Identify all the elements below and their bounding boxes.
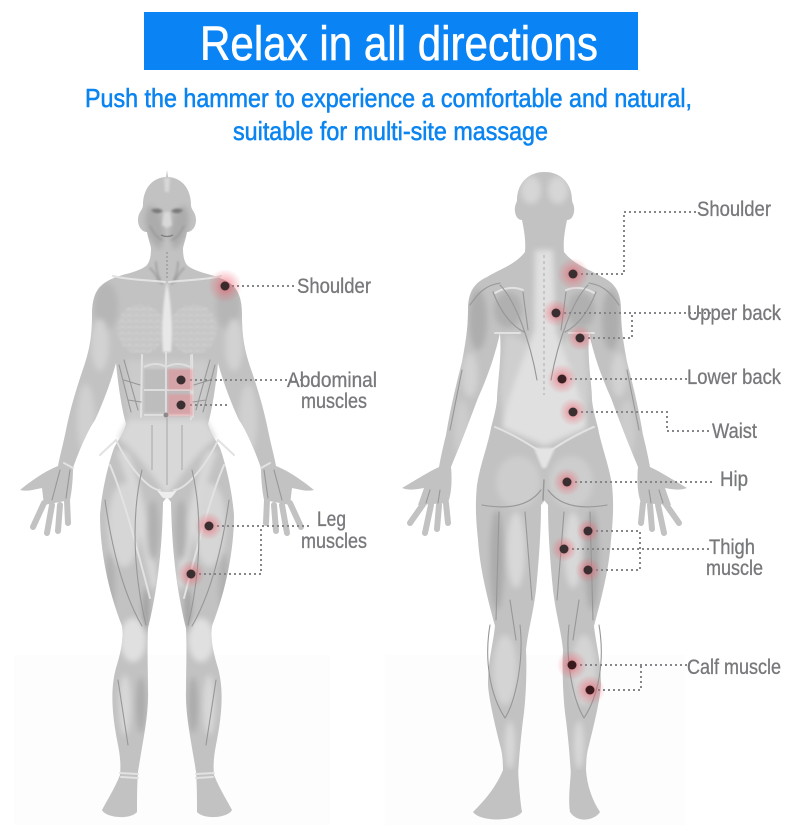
back half: soft masses bbox=[454, 176, 541, 769]
back half: muscle lines bbox=[495, 288, 533, 447]
labels: back: Waist bbox=[712, 420, 757, 443]
figure: front anatomy bbox=[20, 170, 314, 817]
labels: front bbox=[287, 275, 377, 553]
labels: back: Thigh bbox=[709, 536, 755, 559]
connector lines: front bbox=[190, 286, 312, 574]
labels: back: Upper back bbox=[687, 302, 781, 325]
back: right foot bbox=[569, 770, 600, 820]
front half: muscle lines bbox=[64, 276, 165, 778]
labels: back: Calf muscle bbox=[687, 656, 781, 679]
subtitle: suitable for multi-site massage bbox=[233, 116, 548, 146]
labels: front: muscles bbox=[301, 390, 367, 413]
labels: back bbox=[687, 198, 781, 679]
back: left foot bbox=[473, 770, 522, 820]
subtitle bbox=[85, 83, 692, 146]
figure: back anatomy bbox=[402, 172, 687, 820]
background: faint floor panels bbox=[14, 655, 685, 825]
pressure points: back bbox=[542, 258, 605, 705]
labels: front: Shoulder bbox=[297, 275, 371, 298]
subtitle: Push the hammer to experience a comfortable and natural, bbox=[85, 83, 692, 113]
labels: back: Lower back bbox=[687, 366, 781, 389]
labels: back: Shoulder bbox=[697, 198, 771, 221]
labels: front: muscles bbox=[301, 530, 367, 553]
connector lines: back bbox=[564, 212, 712, 690]
labels: back: Hip bbox=[720, 468, 748, 491]
labels: front: Leg bbox=[317, 508, 346, 531]
title banner: Relax in all directions bbox=[200, 18, 598, 71]
front half: soft light and dark masses bbox=[77, 205, 168, 735]
front: center features bbox=[118, 178, 216, 498]
labels: front: Abdominal bbox=[287, 369, 377, 392]
pressure points: front bbox=[168, 269, 242, 588]
labels: back: muscle bbox=[706, 557, 763, 580]
front half: chest and neck bbox=[117, 304, 165, 354]
back: spine and low back bbox=[500, 250, 593, 500]
